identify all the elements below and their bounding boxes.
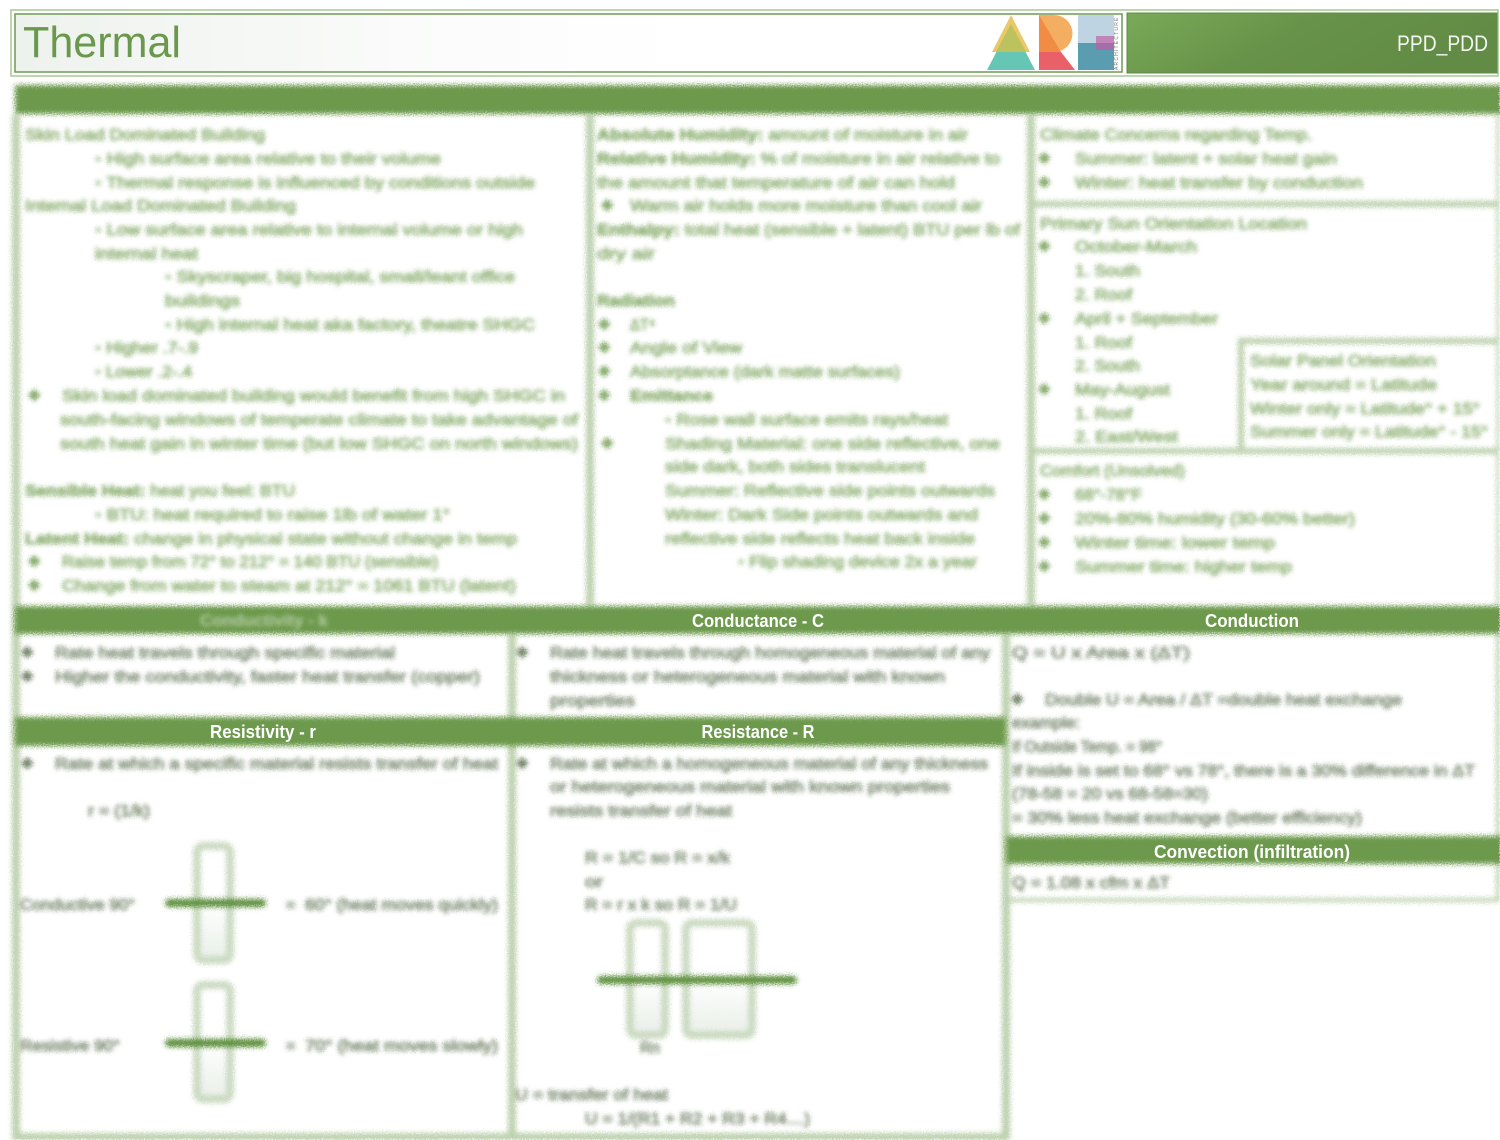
- panel: humidity and radiation: ❖: [597, 388, 611, 405]
- heading: conduction: Conduction: [1205, 611, 1299, 631]
- panel: skin and internal load, heat: ◦ Thermal response is influenced by conditions outside: [95, 175, 535, 192]
- panel: climate, orientation, comfort: Primary Sun Orientation Location: [1040, 216, 1307, 233]
- panel: skin and internal load, heat: Latent Heat: change in physical state without change in temp: [25, 531, 517, 548]
- header: course code panel: PPD_PDD: [1397, 31, 1488, 56]
- panel: humidity and radiation: Absolute Humidity: amount of moisture in air: [597, 127, 969, 144]
- panel: climate, orientation, comfort: ❖: [1037, 559, 1051, 576]
- panel: climate, orientation, comfort: 1. Roof: [1075, 335, 1133, 352]
- diagram: resistive wall: [20, 985, 498, 1099]
- text: conductance: Rate heat travels through homogeneous material of any: [550, 645, 990, 662]
- panel: skin and internal load, heat: south-facing windows of temperate climate to take advantage of: [60, 412, 579, 429]
- text: resistance: [515, 756, 988, 914]
- panel: climate, orientation, comfort: ❖: [1037, 175, 1051, 192]
- text: resistance: ❖: [515, 756, 529, 773]
- text: resistance: or heterogeneous material with known properties: [550, 779, 950, 796]
- label: resistive: [20, 1038, 498, 1055]
- panel: humidity and radiation: Shading Material: one side reflective, one: [665, 436, 1000, 453]
- label: conductive: =: [286, 897, 295, 914]
- panel: humidity and radiation: ❖: [600, 198, 614, 215]
- panel: climate, orientation, comfort: ❖: [1037, 239, 1051, 256]
- text: transfer of heat: [515, 1087, 810, 1128]
- text: conductivity: ❖: [20, 645, 34, 662]
- heading: resistivity: Resistivity - r: [210, 722, 316, 742]
- panel: humidity and radiation: ❖: [597, 364, 611, 381]
- panel: climate, orientation, comfort: ❖: [1037, 382, 1051, 399]
- label: resistive: 70° (heat moves slowly): [305, 1038, 498, 1055]
- heat bar: [597, 976, 797, 984]
- panel: climate, orientation, comfort: ❖: [1037, 487, 1051, 504]
- panel: climate, orientation, comfort: 1. South: [1075, 263, 1140, 280]
- panel: skin and internal load, heat: ◦ Skyscraper, big hospital, small/leant office: [165, 269, 515, 286]
- panel: humidity and radiation: Radiation: [597, 293, 675, 310]
- panel: humidity and radiation: dry air: [597, 246, 656, 263]
- text: resistivity: r = (1/k): [88, 803, 150, 820]
- panel: humidity and radiation: Absorptance (dark matte surfaces): [630, 364, 900, 381]
- text: conduction: = 30% less heat exchange (better efficiency): [1012, 810, 1362, 827]
- text: conductivity: ❖: [20, 669, 34, 686]
- panel: skin and internal load, heat: ◦ Higher .7-.9: [95, 340, 198, 357]
- panel: climate, orientation, comfort: October-March: [1075, 239, 1197, 256]
- label: Rn: Rn: [640, 1040, 660, 1057]
- panel: humidity and radiation: ΔT⁴: [630, 317, 655, 334]
- diagram: layered wall: [597, 923, 797, 1057]
- heat bar: [165, 899, 266, 907]
- panel: humidity and radiation: reflective side reflects heat back inside: [665, 531, 975, 548]
- heading: convection: Convection (infiltration): [1154, 842, 1350, 862]
- panel: climate, orientation, comfort: 2. South: [1075, 358, 1140, 375]
- panel: humidity and radiation: ❖: [597, 340, 611, 357]
- panel: humidity and radiation: Warm air holds more moisture than cool air: [630, 198, 983, 215]
- panel: humidity and radiation: the amount that temperature of air can hold: [597, 175, 955, 192]
- text: conductivity: Higher the conductivity, faster heat transfer (copper): [55, 669, 480, 686]
- panel: climate, orientation, comfort: ❖: [1037, 511, 1051, 528]
- panel: skin and internal load, heat: ❖: [27, 388, 41, 405]
- panel: humidity and radiation: Enthalpy: total heat (sensible + latent) BTU per lb of: [597, 222, 1021, 239]
- panel: skin and internal load, heat: Raise temp from 72° to 212° = 140 BTU (sensible): [62, 554, 438, 571]
- callout: solar panel orientation: Winter only = Latitude° + 15°: [1250, 401, 1480, 418]
- text: conduction: If inside is set to 68° vs 78°, there is a 30% difference in ΔT: [1012, 763, 1475, 780]
- panel: humidity and radiation: Angle of View: [630, 340, 743, 357]
- text: conduction: Q = U x Area x (ΔT): [1012, 645, 1190, 662]
- panel: humidity and radiation: ❖: [597, 317, 611, 334]
- panel: humidity and radiation: Winter: Dark Side points outwards and: [665, 507, 978, 524]
- title: Thermal: [23, 18, 181, 67]
- panel: skin and internal load, heat: Sensible Heat: heat you feel: BTU: [25, 483, 295, 500]
- panel: humidity and radiation: Summer: Reflective side points outwards: [665, 483, 995, 500]
- text: resistance: Rate at which a homogeneous material of any thickness: [550, 756, 988, 773]
- panel: skin and internal load, heat: ◦ Low surface area relative to internal volume or high: [95, 222, 523, 239]
- panel: skin and internal load, heat: south heat gain in winter time (but low SHGC on north windows): [60, 436, 578, 453]
- text: conductance: thickness or heterogeneous material with known: [550, 669, 945, 686]
- panel: climate, orientation, comfort: May-August: [1075, 382, 1171, 399]
- text: conduction: [1010, 645, 1475, 827]
- diagram: conductive wall: [20, 846, 498, 960]
- panel: skin and internal load, heat: Skin Load Dominated Building: [25, 127, 265, 144]
- section bands: [15, 85, 1500, 864]
- label: conductive: [20, 897, 498, 914]
- panel: climate, orientation, comfort: 1. Roof: [1075, 406, 1133, 423]
- panel: climate, orientation, comfort: Climate Concerns regarding Temp.: [1040, 127, 1312, 144]
- panel: skin and internal load, heat: [25, 127, 579, 595]
- callout: solar panel orientation: [1250, 353, 1488, 441]
- panel: climate, orientation, comfort: April + September: [1075, 311, 1219, 328]
- panel: skin and internal load, heat: ❖: [27, 578, 41, 595]
- text: resistance: R = r x k so R = 1/U: [585, 897, 737, 914]
- text: resistivity: Rate at which a specific material resists transfer of heat: [55, 756, 499, 773]
- label: resistive: =: [286, 1038, 295, 1055]
- panel: skin and internal load, heat: ◦ High internal heat aka factory, theatre SHGC: [165, 317, 535, 334]
- label: conductive: 60° (heat moves quickly): [305, 897, 498, 914]
- text: conduction: ❖: [1010, 692, 1024, 709]
- label: resistive: Resistive 90°: [20, 1038, 120, 1055]
- panel: climate, orientation, comfort: 2. East/West: [1075, 429, 1179, 446]
- callout: solar panel orientation: Summer only = Latitude° - 15°: [1250, 424, 1488, 441]
- text: resistance: or: [585, 874, 604, 891]
- text: transfer of heat: U = 1/(R1 + R2 + R3 + R4…): [585, 1111, 810, 1128]
- panel: humidity and radiation: Relative Humidity: % of moisture in air relative to: [597, 151, 1000, 168]
- text: conductance: properties: [550, 693, 635, 710]
- panel: climate, orientation, comfort: 20%-80% humidity (30-60% better): [1075, 511, 1355, 528]
- panel: climate, orientation, comfort: ❖: [1037, 535, 1051, 552]
- heading: conductance: Conductance - C: [692, 611, 824, 631]
- text: conductivity: [20, 645, 480, 686]
- panel: skin and internal load, heat: ◦ High surface area relative to their volume: [95, 151, 441, 168]
- text: resistance: R = 1/C so R = x/k: [585, 850, 731, 867]
- panel: climate, orientation, comfort: Summer: latent + solar heat gain: [1075, 151, 1337, 168]
- heading: conductivity: Conductivity - k: [200, 611, 329, 630]
- panel: skin and internal load, heat: Skin load dominated building would benefit from high SHGC in: [62, 388, 565, 405]
- text: conductance: [515, 645, 990, 710]
- text: resistivity: ❖: [20, 756, 34, 773]
- text: transfer of heat: U = transfer of heat: [515, 1087, 669, 1104]
- text: resistance: resists transfer of heat: [550, 803, 733, 820]
- header: title bar: [11, 10, 1498, 76]
- text: conduction: If Outside Temp. = 98°: [1012, 739, 1162, 756]
- panel: skin and internal load, heat: internal heat: [95, 246, 199, 263]
- text: conduction: (78-58 = 20 vs 68-58=30): [1012, 786, 1208, 803]
- panel: climate, orientation, comfort: 68°-78°F: [1075, 487, 1142, 504]
- panel: humidity and radiation: ◦ Rose wall surface emits rays/heat: [665, 412, 949, 429]
- panel: climate, orientation, comfort: [1037, 127, 1488, 576]
- panel: skin and internal load, heat: Internal Load Dominated Building: [25, 198, 296, 215]
- panel: climate, orientation, comfort: ❖: [1037, 151, 1051, 168]
- panel: humidity and radiation: [597, 127, 1021, 571]
- logo: [987, 15, 1120, 70]
- panel: skin and internal load, heat: Change from water to steam at 212° = 1061 BTU (latent): [62, 578, 516, 595]
- panel: climate, orientation, comfort: Summer time: higher temp: [1075, 559, 1292, 576]
- heading: resistance: Resistance - R: [702, 722, 814, 742]
- label: conductive: Conductive 90°: [20, 897, 135, 914]
- text: resistivity: [20, 756, 499, 820]
- panel: skin and internal load, heat: ◦ Lower .2-.4: [95, 364, 192, 381]
- text: conduction: example:: [1012, 715, 1080, 732]
- header: course code panel: [1127, 13, 1497, 73]
- panel: humidity and radiation: ❖: [600, 436, 614, 453]
- callout: solar panel orientation: Year around = Latitude: [1250, 377, 1437, 394]
- panel: skin and internal load, heat: ◦ BTU: heat required to raise 1lb of water 1°: [95, 507, 450, 524]
- text: conductivity: Rate heat travels through specific material: [55, 645, 395, 662]
- heat bar: [165, 1039, 266, 1047]
- panel: climate, orientation, comfort: Comfort (Unsolved): [1040, 463, 1185, 480]
- panel: skin and internal load, heat: ❖: [27, 554, 41, 571]
- text: convection: Q = 1.08 x cfm x ΔT: [1012, 875, 1170, 892]
- panel: humidity and radiation: Emittance: [630, 388, 713, 405]
- panel: climate, orientation, comfort: Winter time: lower temp: [1075, 535, 1275, 552]
- panel: climate, orientation, comfort: Winter: heat transfer by conduction: [1075, 175, 1363, 192]
- panel: humidity and radiation: side dark, both sides translucent: [665, 459, 926, 476]
- text: conduction: Double U = Area / ΔT =double heat exchange: [1045, 692, 1402, 709]
- panel: climate, orientation, comfort: 2. Roof: [1075, 287, 1133, 304]
- logo: ARCHITECTURE: [1114, 16, 1120, 70]
- callout: solar panel orientation: Solar Panel Orientation: [1250, 353, 1436, 370]
- panel: skin and internal load, heat: buildings: [165, 293, 240, 310]
- panel: humidity and radiation: ◦ Flip shading device 2x a year: [738, 554, 978, 571]
- panel: climate, orientation, comfort: ❖: [1037, 311, 1051, 328]
- text: conductance: ❖: [515, 645, 529, 662]
